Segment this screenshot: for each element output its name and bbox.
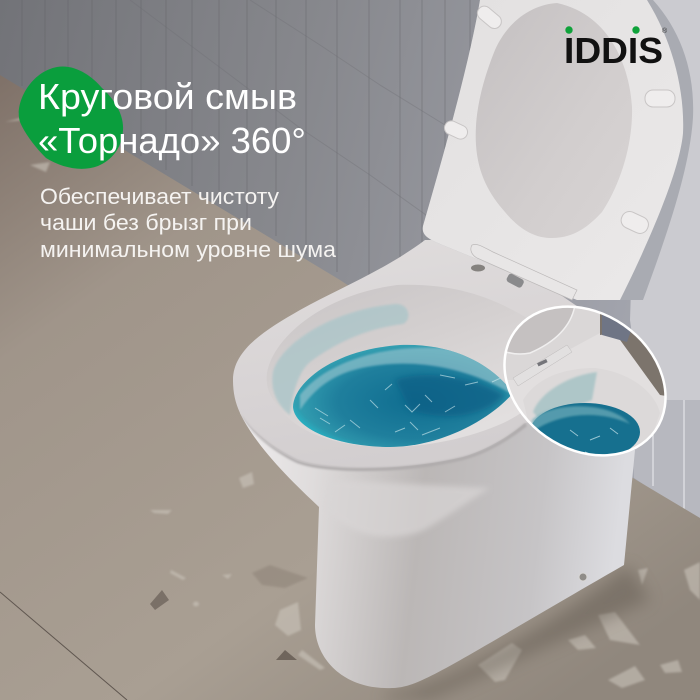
background: right wall and tank (630, 0, 700, 470)
background: lower right wall tiles (630, 400, 700, 522)
background: tiled wall (0, 0, 700, 540)
seat inner cavity (476, 3, 632, 238)
description text: Обеспечивает чистоту (40, 184, 279, 209)
description text (40, 184, 337, 262)
magnifier inset (503, 305, 667, 457)
title: Круговой смыв (38, 76, 297, 117)
toilet bowl rim (233, 240, 640, 471)
title (38, 76, 306, 161)
swirling water (293, 344, 510, 447)
logo: IDDIS: ® (662, 27, 668, 35)
description text: чаши без брызг при (40, 210, 252, 235)
bowl interior (267, 285, 530, 447)
rinse channel highlight (272, 304, 408, 415)
raised seat lid (423, 0, 693, 300)
toilet shadow (380, 565, 650, 700)
drain cap (579, 573, 587, 581)
title: «Торнадо» 360° (38, 120, 306, 161)
seat hinge (471, 244, 577, 300)
green blob behind title (19, 67, 123, 169)
logo: IDDIS: IDDIS (564, 30, 663, 71)
toilet pedestal (240, 350, 635, 688)
lid bumpers (442, 3, 675, 236)
description text: минимальном уровне шума (40, 237, 337, 262)
